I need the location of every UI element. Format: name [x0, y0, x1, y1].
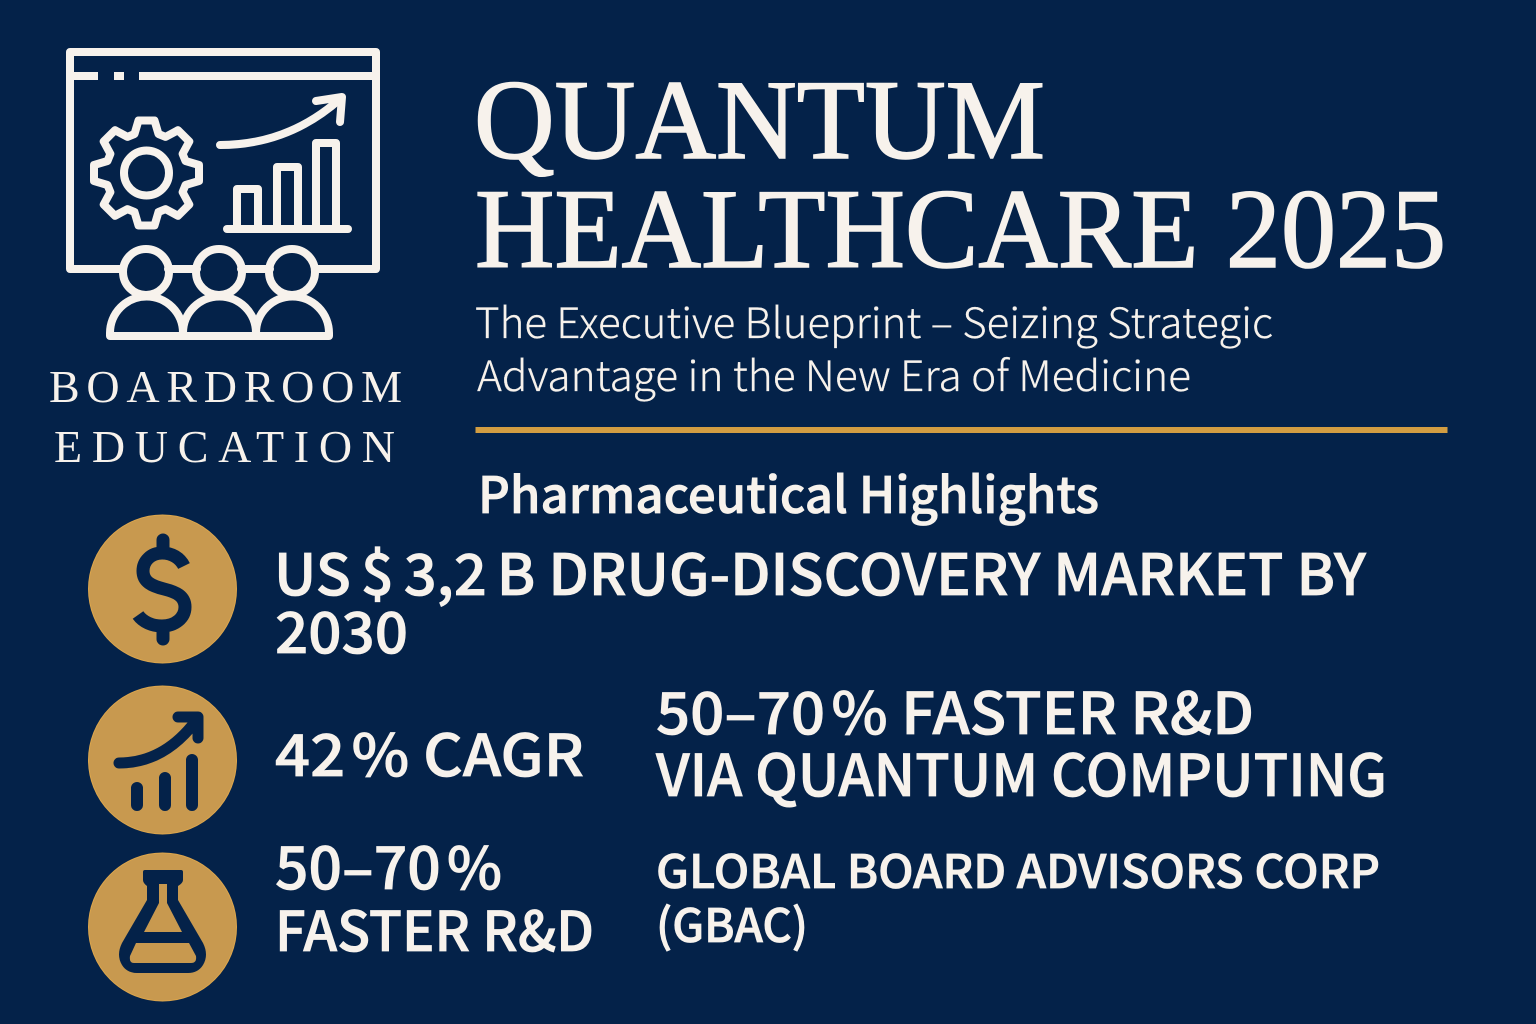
- highlight: CAGR: 42 % CAGR: [275, 709, 584, 793]
- highlight: faster R&D: [275, 822, 594, 967]
- icon: rising arrow: [220, 97, 342, 145]
- icon: three people: [110, 249, 329, 336]
- section heading: Pharmaceutical Highlights: [478, 456, 1099, 528]
- icon: bar chart: [227, 143, 348, 229]
- icon: presentation screen with gear, chart and audience: [70, 52, 376, 336]
- highlight: market size: [274, 530, 1366, 670]
- highlight line 2: VIA QUANTUM COMPUTING: [655, 729, 1387, 813]
- title: [474, 58, 1446, 292]
- logo word: boardroom: BOARDROOM: [49, 361, 402, 412]
- icon: gear: [94, 120, 199, 226]
- highlight: faster R&D via quantum computing: [655, 667, 1387, 813]
- highlight line 1: US $ 3,2 B DRUG-DISCOVERY MARKET BY: [274, 530, 1366, 612]
- highlight line 1: 50–70 % FASTER R&D: [656, 667, 1254, 751]
- highlight line 2: FASTER R&D: [275, 887, 594, 967]
- title line 2: HEALTHCARE 2025: [475, 167, 1446, 292]
- subtitle: [475, 290, 1273, 404]
- highlight line 1: 50–70 %: [275, 822, 502, 906]
- logo: boardroom education: [49, 52, 402, 472]
- icon: flask coin: [88, 853, 236, 1001]
- subtitle line 2: Advantage in the New Era of Medicine: [477, 343, 1191, 404]
- organisation line 2: (GBAC): [656, 890, 808, 956]
- gold divider: [476, 427, 1448, 433]
- subtitle line 1: The Executive Blueprint – Seizing Strategic: [475, 290, 1273, 351]
- icon: dollar coin: [88, 515, 236, 663]
- highlight line 2: 2030: [275, 588, 408, 670]
- organisation name: [656, 836, 1380, 956]
- title line 1: QUANTUM: [474, 58, 1045, 183]
- logo word: education: EDUCATION: [54, 421, 395, 472]
- icon: growth chart coin: [88, 686, 236, 834]
- organisation line 1: GLOBAL BOARD ADVISORS CORP: [656, 836, 1380, 902]
